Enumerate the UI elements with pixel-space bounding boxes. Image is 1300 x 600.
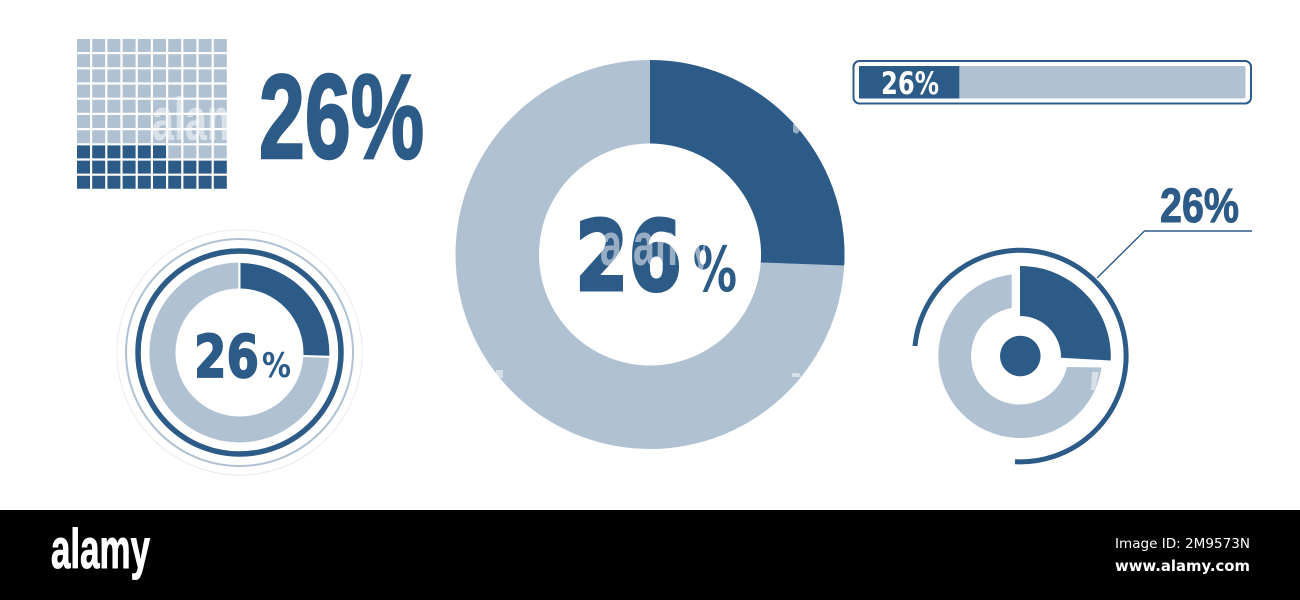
central donut 26 percent segment xyxy=(650,60,845,266)
progress bar: 26% xyxy=(881,66,939,102)
watermark overlays xyxy=(152,86,1099,390)
outer arc xyxy=(915,250,1126,462)
watermark over central label: alamy xyxy=(600,211,712,278)
leader line xyxy=(1097,231,1252,278)
left ring donut chart xyxy=(117,230,362,475)
callout label: 26% xyxy=(1160,180,1239,233)
watermark spots xyxy=(496,124,1099,390)
center dot xyxy=(1000,336,1041,376)
website: www.alamy.com xyxy=(1115,557,1250,575)
donut remainder segment xyxy=(149,262,329,442)
donut 26 percent segment xyxy=(240,263,329,356)
light ring xyxy=(126,239,353,466)
right radial chart with callout xyxy=(915,180,1252,462)
central donut label: 26 xyxy=(575,200,682,313)
dark 26 percent segment xyxy=(1020,266,1111,360)
dark ring xyxy=(138,251,341,454)
progress bar xyxy=(854,61,1251,104)
left donut label: 26 xyxy=(194,322,259,391)
large percentage beside waffle: 26% xyxy=(259,50,424,184)
central donut chart xyxy=(456,60,845,449)
central donut remainder segment xyxy=(456,60,844,449)
footer band xyxy=(0,510,1300,600)
watermark over waffle: alamy xyxy=(152,86,264,153)
outer thin ring xyxy=(117,230,362,475)
central donut label: % xyxy=(693,233,737,306)
footer logo: alamy xyxy=(51,517,150,580)
image id: Image ID: 2M9573N xyxy=(1115,536,1250,552)
left donut label: % xyxy=(262,346,291,386)
light ring segment xyxy=(938,274,1102,438)
waffle chart: 26 of 100 squares xyxy=(77,39,227,189)
